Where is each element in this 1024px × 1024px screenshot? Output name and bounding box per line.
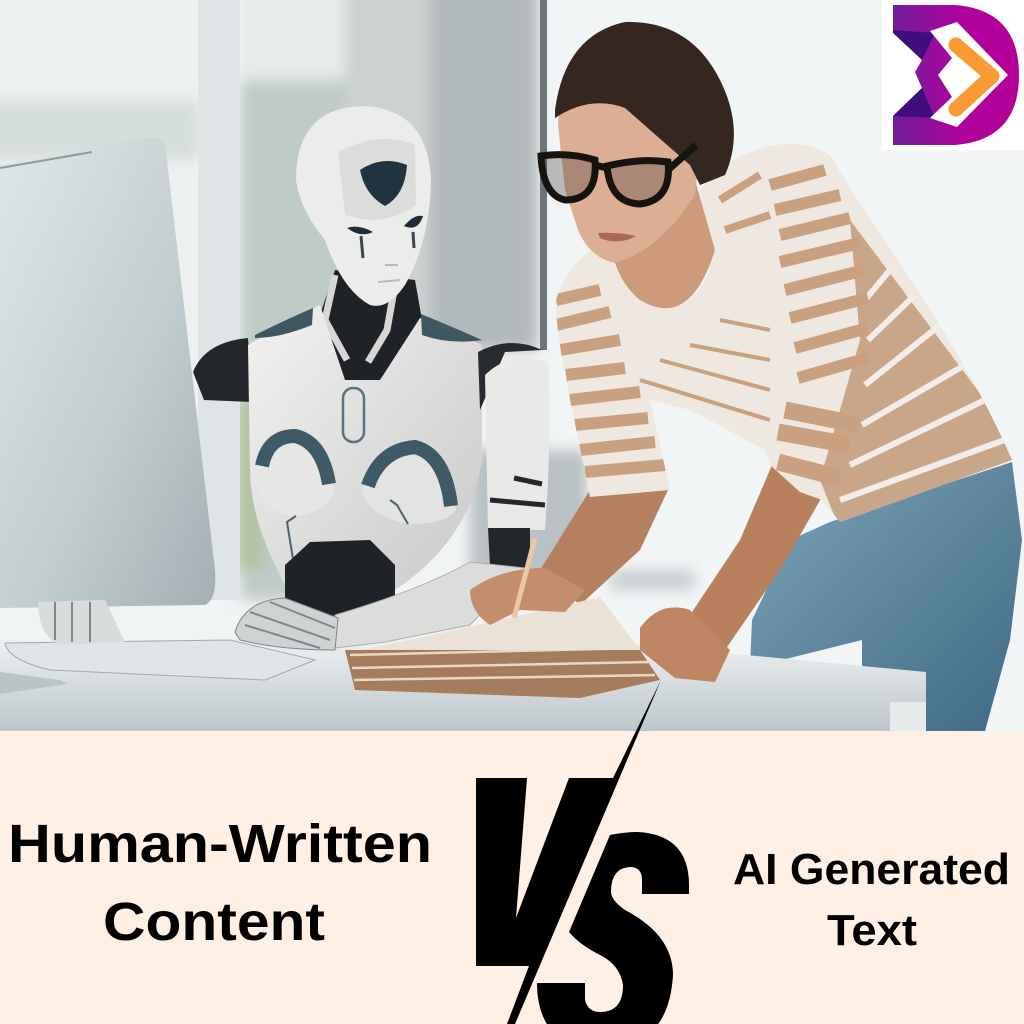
window pillar [198, 0, 240, 600]
robot neck [320, 270, 422, 380]
heading: ai generated text: AI Generated [733, 845, 1010, 894]
heading: ai generated text: Text [827, 906, 917, 955]
forearm left [540, 490, 668, 605]
woman's hands and pencil [470, 538, 730, 682]
stack of papers [345, 597, 660, 698]
robot forehead sensor [360, 161, 407, 206]
panel: photo of robot and woman working [0, 0, 1024, 740]
logo badge [882, 0, 1024, 150]
robot torso [248, 305, 482, 590]
desk [0, 640, 926, 731]
robot eyes [347, 216, 423, 234]
sweater stripes [556, 170, 1024, 530]
sweater [556, 144, 1012, 522]
robot right hand [235, 598, 338, 650]
robot forearm [335, 562, 525, 648]
robot left hand [38, 600, 125, 645]
jeans [750, 462, 1022, 731]
glasses [541, 145, 696, 204]
hair [555, 22, 734, 185]
robot abdomen mechanics [285, 540, 395, 620]
robot chest plates [306, 484, 334, 514]
robot upper arm [478, 343, 542, 410]
office background [0, 0, 1024, 740]
heading: human-written content: Content [103, 892, 325, 952]
face [558, 95, 700, 263]
robot [38, 106, 549, 650]
neck and chest [610, 180, 715, 308]
forearm right [690, 465, 822, 650]
robot head [296, 106, 431, 306]
keyboard [5, 640, 315, 680]
monitor [0, 137, 215, 694]
heading: human-written content: Human-Written [8, 814, 432, 874]
heading: human-written content [8, 814, 432, 952]
panel: cream caption band [0, 731, 1024, 1024]
woman [540, 22, 1024, 650]
versus graphic [476, 680, 689, 1024]
heading: ai generated text [733, 845, 1010, 955]
mouth [598, 233, 636, 242]
robot shoulder joint [193, 338, 252, 402]
